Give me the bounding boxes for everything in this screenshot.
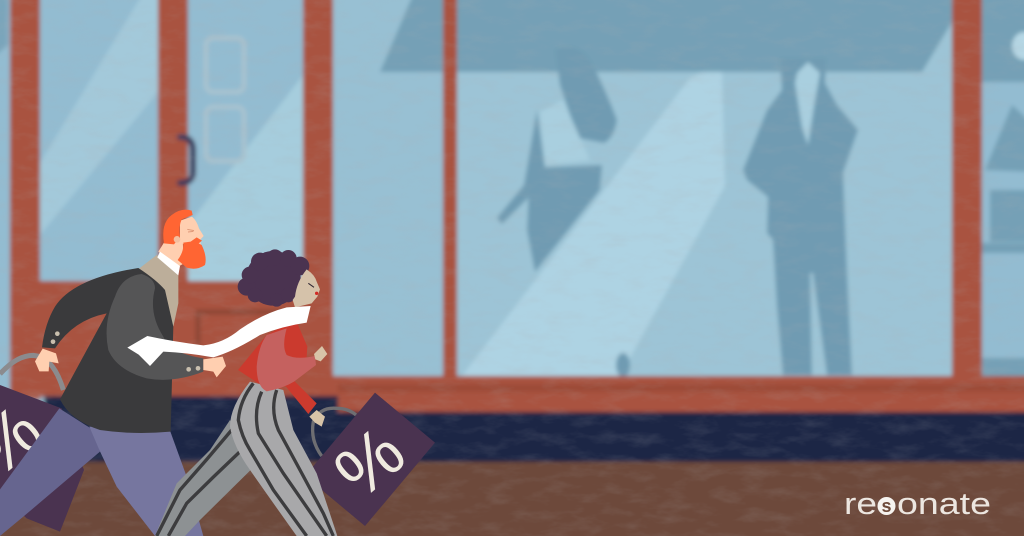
man: torso and back sleeve <box>42 268 173 433</box>
frame lower shading <box>338 384 1024 392</box>
man: hair <box>163 210 193 244</box>
door reflection: right pane light band <box>188 75 303 285</box>
man: inner coat <box>139 255 178 327</box>
glass base <box>0 0 1024 410</box>
man: eye <box>187 229 194 232</box>
woman: back leg stripes <box>157 430 242 536</box>
man: ear <box>174 236 180 243</box>
man: hands <box>35 349 59 371</box>
window reflection: far left shadow <box>0 0 8 60</box>
bag body <box>305 393 435 526</box>
man: cuff buttons <box>51 331 200 372</box>
man: front leg <box>89 427 203 536</box>
shadow figure: woman <box>497 47 617 272</box>
woman: pink sleeve <box>257 328 316 391</box>
door decal: lower outline <box>206 107 244 161</box>
woman: upper hand <box>314 346 327 361</box>
woman: face <box>293 269 320 307</box>
woman: red torso <box>238 323 307 387</box>
logo letters: re: re <box>844 486 877 521</box>
awning reflection <box>380 0 952 72</box>
woman: lower red arm <box>286 380 317 414</box>
woman: hair <box>238 249 309 307</box>
woman: scarf <box>127 306 311 366</box>
logo: resonate <box>844 486 991 521</box>
woman's hair <box>555 47 617 143</box>
woman: front leg <box>230 382 337 536</box>
door reflection: left pane light band <box>40 0 158 235</box>
woman: bag handle <box>313 408 356 456</box>
man: back leg <box>0 408 100 536</box>
woman: eye <box>308 283 314 287</box>
logo letters: onate: onate <box>897 486 991 521</box>
man's shirt <box>795 62 820 145</box>
man: face <box>180 217 204 250</box>
window frames <box>10 0 1024 412</box>
brown floor <box>0 462 1024 536</box>
woman: back leg <box>155 420 251 536</box>
woman: lower hand <box>309 410 325 427</box>
logo mark letter: s <box>881 496 892 516</box>
woman's skirt <box>527 165 602 272</box>
man: neck <box>158 240 184 267</box>
side pane glass <box>332 0 444 378</box>
man: collar <box>157 252 180 275</box>
door handle <box>180 137 193 183</box>
left shopping bag <box>0 355 84 532</box>
logo mark: circled s <box>878 497 896 515</box>
door decal: upper outline <box>206 38 244 92</box>
man <box>0 210 226 536</box>
bag handle <box>0 355 63 390</box>
main window glass light tone <box>457 0 953 378</box>
right pane shadows <box>982 0 1024 378</box>
bag percent sign: % <box>320 411 420 514</box>
right pane light blob <box>1012 32 1024 60</box>
shadow figure: man <box>743 58 858 375</box>
woman: front leg stripes <box>238 383 333 536</box>
woman's arm <box>497 110 545 224</box>
characters <box>0 210 435 536</box>
bag body <box>0 385 84 532</box>
navy base band <box>44 396 1024 462</box>
right shopping bag <box>305 393 435 526</box>
light beam <box>462 72 725 376</box>
man: front sleeve <box>107 274 203 380</box>
door kick panel detail <box>198 312 304 345</box>
man's suit and legs <box>743 58 858 375</box>
shadow figure: woman's blouse <box>540 100 590 165</box>
small floor shadow object <box>616 353 630 377</box>
woman <box>127 249 435 536</box>
man: beard <box>178 237 206 269</box>
woman: lips <box>315 292 318 295</box>
